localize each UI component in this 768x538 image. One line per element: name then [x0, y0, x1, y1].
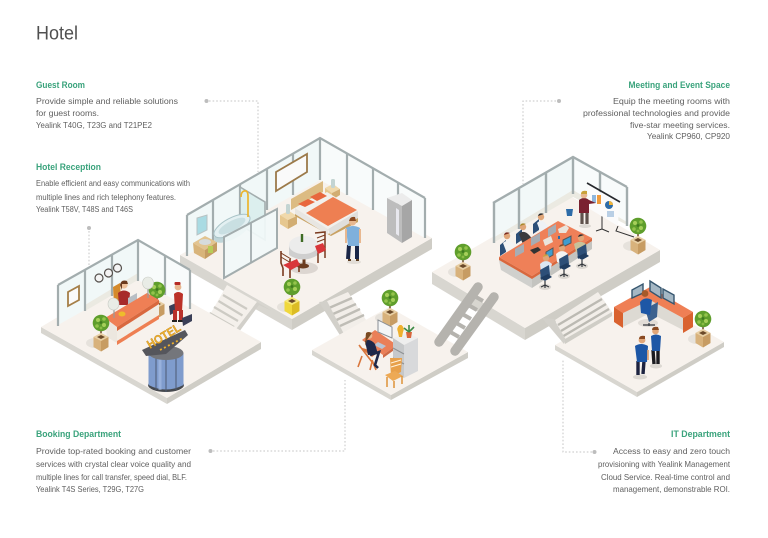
standing staff member: right: [650, 327, 662, 368]
text block: hotel reception: Hotel Reception: [36, 162, 101, 172]
presenter: [579, 191, 596, 228]
panel: hotel reception: [41, 240, 261, 404]
bedside tables: [280, 179, 340, 229]
stairs: meeting to it department: [542, 292, 612, 344]
revolving door with hotel sign: [142, 321, 188, 392]
text block: booking department: Provide top-rated booking and customer: [36, 446, 191, 456]
dining table and chairs: [281, 232, 326, 278]
text block: meeting and event space: professional technologies and provide: [583, 108, 730, 118]
back walls: [58, 240, 190, 326]
table laptops and papers: [515, 224, 571, 259]
leader line: it department: [563, 360, 596, 454]
leader line: hotel reception: [87, 226, 91, 272]
text block: booking department: multiple lines for call transfer, speed dial, BLF.: [36, 472, 187, 482]
shower pipe: [241, 191, 248, 217]
bathroom sink and mirror: [193, 215, 217, 259]
wardrobe: [387, 193, 412, 243]
floor slab: [41, 271, 261, 404]
wooden chair: [385, 358, 403, 388]
bathtub: [211, 210, 253, 247]
office desk with monitor: [362, 320, 397, 358]
glass partition: [224, 209, 277, 278]
text block: booking department: Yealink T4S Series, T29G, T27G: [36, 484, 144, 494]
text block: guest room: [36, 80, 178, 130]
floor slab: [180, 175, 432, 330]
conference table: [499, 221, 592, 288]
wall clocks: [95, 264, 122, 282]
monitors: [632, 281, 674, 304]
back walls: [493, 157, 627, 243]
text block: it department: [598, 429, 731, 494]
panel: meeting and event space: [432, 157, 660, 340]
wall picture: [276, 154, 307, 191]
receptionist: [113, 280, 137, 305]
escalator: [439, 287, 494, 351]
front row of attendees: [539, 234, 589, 290]
back walls: [187, 138, 425, 256]
l-shaped desk: [614, 287, 693, 333]
whiteboard and presentation: [587, 183, 634, 237]
tree: [375, 290, 398, 326]
text block: it department: provisioning with Yealink Management: [598, 459, 731, 469]
text block: hotel reception: Yealink T58V, T48S and T46S: [36, 204, 133, 214]
trophy and plant: [397, 325, 414, 338]
filing cabinet: [393, 333, 418, 378]
text block: meeting and event space: Meeting and Event Space: [628, 80, 730, 90]
standing staff member: left: [633, 336, 648, 380]
text block: booking department: [36, 429, 191, 494]
text block: meeting and event space: Equip the meeting rooms with: [613, 96, 730, 106]
panel: guest room: [180, 138, 432, 330]
text block: it department: IT Department: [671, 429, 730, 439]
man in blue shirt: [346, 217, 361, 264]
text block: meeting and event space: five-star meeting services.: [630, 120, 730, 130]
tree: behind desk: [142, 282, 165, 318]
tree: right: [623, 218, 646, 254]
bed: [291, 181, 358, 236]
panel: it department: [555, 281, 724, 397]
leader line: booking department: [208, 380, 345, 453]
text block: hotel reception: [36, 162, 190, 214]
title: Hotel: [36, 24, 78, 44]
stairs: reception to guest room: [208, 285, 272, 337]
text block: meeting and event space: Yealink CP960, CP920: [647, 131, 730, 141]
desk lamps: [108, 277, 154, 318]
leader line: meeting and event space: [523, 99, 561, 184]
text block: booking department: Booking Department: [36, 429, 121, 439]
text block: hotel reception: Enable efficient and easy communications with: [36, 178, 190, 188]
shower partition: [240, 187, 265, 240]
text block: guest room: for guest rooms.: [36, 108, 99, 118]
stairs: guest room to booking: [319, 292, 368, 341]
text block: it department: Access to easy and zero touch: [613, 446, 730, 456]
tree: left: [448, 244, 471, 280]
text block: hotel reception: multiple lines and rich telephony features.: [36, 192, 176, 202]
text block: it department: Cloud Service. Real-time control and: [601, 472, 730, 482]
reception desk: [105, 293, 159, 345]
wall picture: [68, 286, 79, 306]
tree: [688, 311, 711, 348]
leader line: guest room: [204, 99, 258, 172]
text block: guest room: Provide simple and reliable solutions: [36, 96, 178, 106]
tree: front of desk: [86, 315, 109, 352]
text block: meeting and event space: [583, 80, 730, 141]
seated it worker: [638, 290, 658, 327]
bellman with luggage: [169, 282, 192, 326]
text block: it department: management, demonstrable ROI.: [613, 484, 730, 494]
tree: yellow pot: [277, 279, 300, 316]
booking agent on chair: [358, 332, 379, 370]
text block: booking department: services with crystal clear voice quality and: [36, 459, 191, 469]
text block: guest room: Yealink T40G, T23G and T21PE2: [36, 120, 152, 130]
text block: guest room: Guest Room: [36, 80, 85, 90]
floor slab: [432, 194, 660, 340]
back row of attendees: [500, 213, 552, 256]
waste bin: [566, 209, 573, 216]
panel: booking department: [312, 290, 468, 400]
revolving door with hotel sign: HOTEL: [144, 321, 183, 352]
floor slab: [312, 307, 468, 400]
floor slab: [555, 295, 724, 397]
